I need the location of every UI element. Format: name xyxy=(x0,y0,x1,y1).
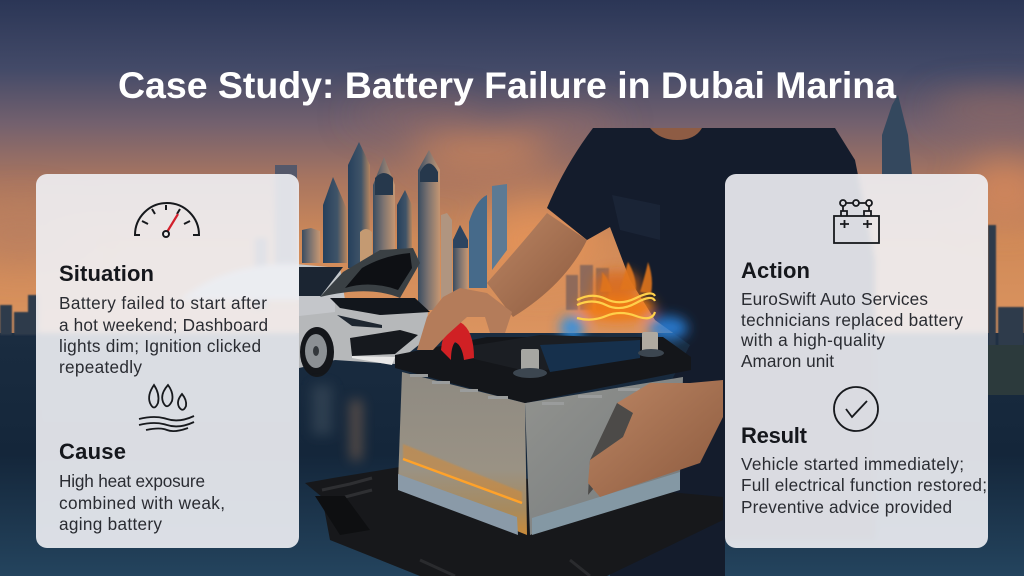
icon: gauge xyxy=(135,203,199,237)
technician hand on battery lid xyxy=(417,288,512,350)
water reflections xyxy=(312,385,362,460)
text: situation details: Battery failed to start after xyxy=(59,293,267,313)
text: cause details: combined with weak, xyxy=(59,493,225,513)
text: cause details xyxy=(59,471,225,534)
skyline xyxy=(0,95,1024,395)
text: action details: Amaron unit xyxy=(741,351,834,371)
technician forearm xyxy=(487,213,587,317)
heading: result: Result xyxy=(741,423,808,448)
sky xyxy=(0,0,1024,345)
text: action details: technicians replaced battery xyxy=(741,310,963,330)
panel: situation and cause xyxy=(36,174,299,548)
technician hand gripping battery xyxy=(588,380,723,497)
text: result details: Full electrical function restored; xyxy=(741,475,987,495)
text: result details xyxy=(741,454,987,517)
heat waves above battery xyxy=(560,262,688,340)
text: result details: Preventive advice provided xyxy=(741,497,952,517)
title: Case Study: Battery Failure in Dubai Marina xyxy=(118,64,897,106)
technician shirt and trousers xyxy=(547,128,875,576)
text: situation details: repeatedly xyxy=(59,357,142,377)
text: situation details xyxy=(59,293,268,377)
battery tray xyxy=(305,467,723,576)
text: cause details: aging battery xyxy=(59,514,162,534)
text: action details: EuroSwift Auto Services xyxy=(741,289,928,309)
water xyxy=(0,333,1024,576)
text: situation details: lights dim; Ignition clicked xyxy=(59,336,261,356)
icon: heat waves xyxy=(139,385,194,431)
heading: situation: Situation xyxy=(59,261,154,286)
panel: action and result xyxy=(725,174,988,548)
battery xyxy=(395,322,691,535)
heading: cause: Cause xyxy=(59,439,126,464)
car with open hood xyxy=(180,248,430,377)
text: action details: with a high-quality xyxy=(740,330,885,350)
text: situation details: a hot weekend; Dashboard xyxy=(59,315,268,335)
heading: action: Action xyxy=(741,258,810,283)
text: action details xyxy=(740,289,963,371)
text: cause details: High heat exposure xyxy=(59,471,205,491)
text: result details: Vehicle started immediately; xyxy=(741,454,964,474)
icon: battery with connector xyxy=(834,200,879,243)
icon: check mark xyxy=(834,387,878,431)
